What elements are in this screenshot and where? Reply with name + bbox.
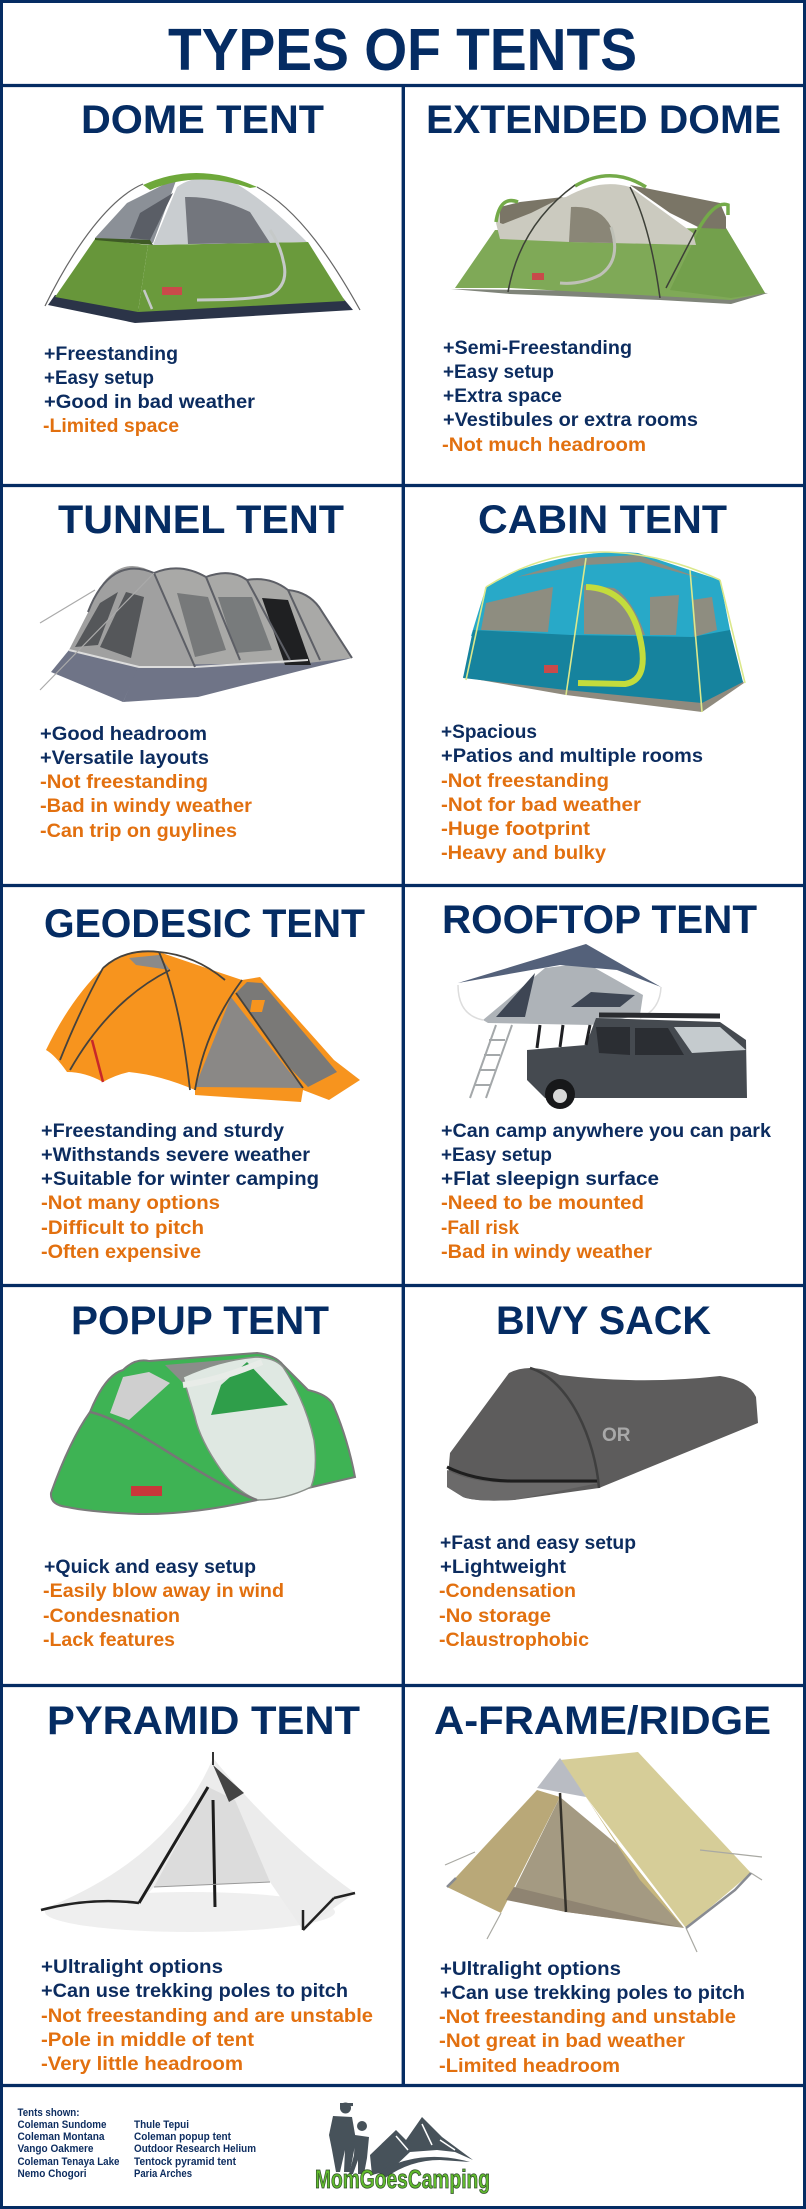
pros and cons list: -Easily blow away in wind bbox=[43, 1580, 284, 1602]
panel: a-frame ridge tent bbox=[434, 1699, 771, 2077]
heading: cabin tent: CABIN TENT bbox=[478, 498, 727, 542]
pros and cons list: -Not freestanding and unstable bbox=[439, 2006, 736, 2028]
tents shown credits: Coleman popup tent bbox=[134, 2131, 231, 2143]
pros and cons list bbox=[41, 1120, 319, 1263]
panel: rooftop tent bbox=[441, 898, 771, 1263]
pros and cons list bbox=[441, 721, 703, 864]
icon: pyramid tent illustration bbox=[41, 1752, 355, 1932]
tents shown credits: Coleman Sundome bbox=[18, 2119, 106, 2131]
heading: extended dome: EXTENDED DOME bbox=[426, 98, 781, 142]
heading: dome tent: DOME TENT bbox=[81, 98, 324, 142]
pros and cons list: -Lack features bbox=[43, 1629, 175, 1651]
pros and cons list: +Extra space bbox=[443, 385, 562, 407]
pros and cons list: +Can camp anywhere you can park bbox=[441, 1120, 771, 1142]
pros and cons list: +Freestanding and sturdy bbox=[41, 1120, 284, 1142]
panel: bivy sack bbox=[439, 1299, 758, 1651]
pros and cons list: +Fast and easy setup bbox=[440, 1532, 636, 1554]
pros and cons list: -Very little headroom bbox=[41, 2053, 243, 2075]
panel: pyramid tent bbox=[41, 1699, 373, 2075]
pros and cons list: -Not much headroom bbox=[442, 434, 646, 456]
pros and cons list: -Not for bad weather bbox=[441, 794, 641, 816]
icon: dome tent illustration bbox=[45, 173, 360, 323]
pros and cons list: +Easy setup bbox=[44, 367, 154, 389]
pros and cons list: -Need to be mounted bbox=[441, 1192, 644, 1214]
icon: popup tent illustration bbox=[51, 1353, 355, 1514]
pros and cons list: -Not freestanding bbox=[441, 770, 609, 792]
icon: cabin tent illustration bbox=[463, 552, 745, 712]
tents shown credits: Thule Tepui bbox=[134, 2119, 189, 2131]
pros and cons list: -No storage bbox=[439, 1605, 551, 1627]
heading: popup tent: POPUP TENT bbox=[71, 1299, 329, 1343]
tents shown credits: Nemo Chogori bbox=[18, 2168, 86, 2180]
icon: a-frame tent illustration bbox=[445, 1752, 762, 1952]
heading: geodesic tent: GEODESIC TENT bbox=[44, 902, 365, 946]
tents shown credits: Paria Arches bbox=[134, 2168, 192, 2180]
tents shown credits bbox=[18, 2107, 256, 2180]
pros and cons list: +Vestibules or extra rooms bbox=[443, 409, 698, 431]
panel: tunnel tent bbox=[40, 498, 352, 842]
pros and cons list: +Suitable for winter camping bbox=[41, 1168, 319, 1190]
pros and cons list: +Good in bad weather bbox=[44, 391, 255, 413]
pros and cons list bbox=[40, 723, 252, 842]
pros and cons list: -Fall risk bbox=[441, 1217, 519, 1239]
tents shown credits: Outdoor Research Helium bbox=[134, 2143, 256, 2155]
pros and cons list bbox=[442, 337, 698, 456]
pros and cons list: +Easy setup bbox=[441, 1144, 552, 1166]
icon: geodesic tent illustration bbox=[46, 951, 360, 1102]
panel: cabin tent bbox=[441, 498, 745, 864]
pros and cons list bbox=[441, 1120, 771, 1263]
heading: tunnel tent: TUNNEL TENT bbox=[58, 498, 344, 542]
icon: bivy sack illustration: OR bbox=[602, 1425, 631, 1446]
panel: dome tent bbox=[43, 98, 360, 437]
icon: rooftop tent on truck illustration bbox=[458, 944, 747, 1109]
pros and cons list: -Limited space bbox=[43, 415, 179, 437]
pros and cons list: +Flat sleepign surface bbox=[441, 1168, 659, 1190]
pros and cons list: -Difficult to pitch bbox=[41, 1217, 204, 1239]
tents shown credits: Coleman Tenaya Lake bbox=[18, 2156, 120, 2168]
pros and cons list: -Often expensive bbox=[41, 1241, 201, 1263]
pros and cons list: +Easy setup bbox=[443, 361, 554, 383]
pros and cons list: +Patios and multiple rooms bbox=[441, 745, 703, 767]
pros and cons list: -Not great in bad weather bbox=[439, 2030, 685, 2052]
pros and cons list: -Bad in windy weather bbox=[441, 1241, 652, 1263]
logo: MomGoesCamping bbox=[315, 2102, 490, 2194]
pros and cons list: -Heavy and bulky bbox=[441, 842, 606, 864]
icon: bivy sack illustration bbox=[447, 1368, 758, 1501]
pros and cons list bbox=[43, 1556, 284, 1651]
panel: popup tent bbox=[43, 1299, 355, 1651]
heading: rooftop tent: ROOFTOP TENT bbox=[442, 898, 757, 942]
pros and cons list: +Ultralight options bbox=[41, 1956, 223, 1978]
pros and cons list: -Huge footprint bbox=[441, 818, 591, 840]
pros and cons list: +Ultralight options bbox=[440, 1958, 621, 1980]
pros and cons list: -Not freestanding bbox=[40, 771, 208, 793]
tents shown credits: Tents shown: bbox=[18, 2107, 80, 2119]
heading: bivy sack: BIVY SACK bbox=[496, 1299, 711, 1343]
pros and cons list: -Claustrophobic bbox=[439, 1629, 589, 1651]
pros and cons list: +Spacious bbox=[441, 721, 537, 743]
pros and cons list: +Quick and easy setup bbox=[44, 1556, 256, 1578]
pros and cons list: -Not freestanding and are unstable bbox=[41, 2005, 373, 2027]
pros and cons list: -Can trip on guylines bbox=[40, 820, 237, 842]
pros and cons list bbox=[439, 1958, 745, 2077]
pros and cons list: -Not many options bbox=[41, 1192, 220, 1214]
pros and cons list: +Withstands severe weather bbox=[41, 1144, 310, 1166]
pros and cons list: -Bad in windy weather bbox=[40, 795, 252, 817]
icon: tunnel tent illustration bbox=[40, 566, 352, 702]
icon: extended dome tent illustration bbox=[451, 176, 768, 304]
pros and cons list: -Condesnation bbox=[43, 1605, 180, 1627]
pros and cons list: +Versatile layouts bbox=[40, 747, 209, 769]
pros and cons list: +Good headroom bbox=[40, 723, 207, 745]
pros and cons list: -Pole in middle of tent bbox=[41, 2029, 255, 2051]
pros and cons list: +Can use trekking poles to pitch bbox=[440, 1982, 745, 2004]
tents shown credits: Tentock pyramid tent bbox=[134, 2156, 236, 2168]
pros and cons list bbox=[43, 343, 255, 437]
pros and cons list: +Freestanding bbox=[44, 343, 178, 365]
pros and cons list: -Condensation bbox=[439, 1580, 576, 1602]
title: TYPES OF TENTS bbox=[168, 17, 637, 83]
heading: pyramid tent: PYRAMID TENT bbox=[47, 1699, 360, 1743]
pros and cons list: -Limited headroom bbox=[439, 2055, 620, 2077]
pros and cons list: +Can use trekking poles to pitch bbox=[41, 1980, 348, 2002]
logo: MomGoesCamping: MomGoesCamping bbox=[315, 2166, 490, 2194]
tents shown credits: Coleman Montana bbox=[18, 2131, 105, 2143]
pros and cons list: +Semi-Freestanding bbox=[443, 337, 632, 359]
panel: geodesic tent bbox=[41, 902, 365, 1263]
heading: a-frame/ridge: A-FRAME/RIDGE bbox=[434, 1699, 771, 1743]
pros and cons list: +Lightweight bbox=[440, 1556, 567, 1578]
pros and cons list bbox=[41, 1956, 373, 2075]
pros and cons list bbox=[439, 1532, 636, 1651]
panel: extended dome bbox=[426, 98, 781, 456]
tents shown credits: Vango Oakmere bbox=[18, 2143, 94, 2155]
